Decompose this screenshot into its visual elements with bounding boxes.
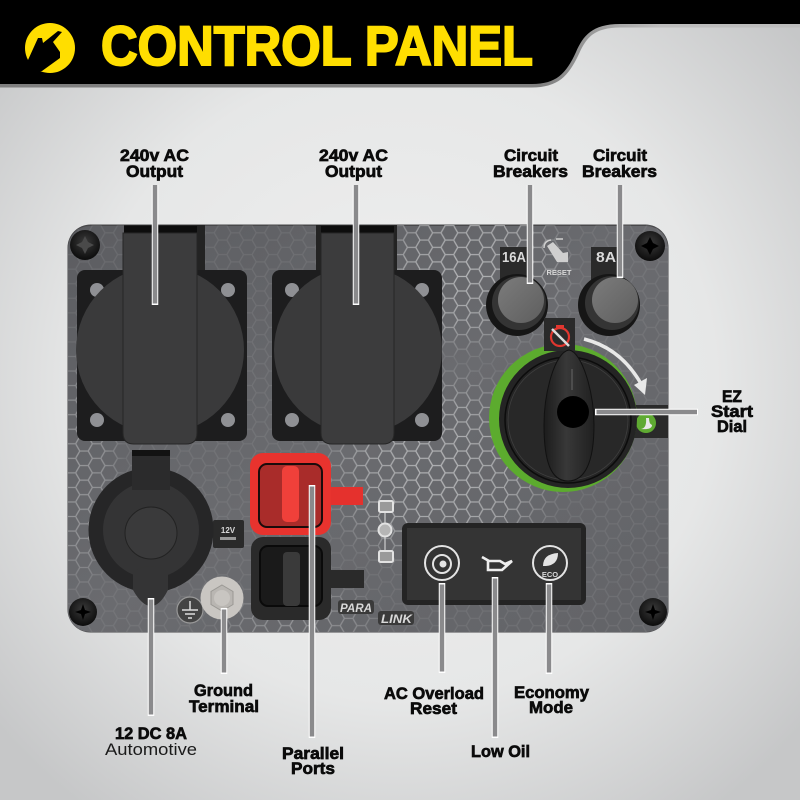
icon: low oil can	[482, 557, 512, 570]
ParaLink logo: LINK	[381, 614, 413, 626]
ParaLink logo	[338, 600, 414, 626]
leader: low oil	[492, 577, 498, 738]
label: EZ Start Dial: Start	[711, 402, 753, 421]
icon: economy leaf	[533, 546, 567, 580]
leader core: AC overload	[440, 584, 444, 672]
label: 12 DC 8A Automotive: 12 DC 8A	[115, 724, 187, 743]
label: Circuit Breakers 16A: Breakers	[493, 162, 568, 181]
label: AC Overload Reset: AC Overload	[384, 684, 484, 703]
label: 240v AC Output left: Output	[126, 162, 183, 181]
parallel port: red	[250, 453, 363, 535]
label: Low Oil: Low Oil	[471, 742, 530, 761]
parallel port: black	[251, 537, 364, 620]
label: Parallel Ports: Ports	[291, 759, 335, 778]
leader core: EZ start	[596, 410, 697, 414]
label: 12 DC 8A Automotive: Automotive	[105, 740, 197, 759]
leader: parallel	[309, 485, 315, 738]
dial handle	[544, 350, 594, 481]
ParaLink logo: PARA	[340, 603, 372, 615]
breaker label tag: 8A: 8A	[596, 249, 616, 266]
label: Circuit Breakers 8A: Breakers	[582, 162, 657, 181]
label: 240v AC Output left: 240v AC	[120, 146, 189, 165]
circuit breaker knob: 16A	[486, 274, 548, 336]
leader core: 240v AC right	[354, 185, 358, 304]
label: 240v AC Output left	[120, 146, 189, 181]
icon: reset hand: RESET	[546, 268, 572, 277]
leader: economy	[546, 583, 552, 674]
panel: control plate	[68, 224, 668, 632]
header band	[0, 0, 800, 84]
leader core: 12 DC	[149, 600, 153, 714]
ground terminal bolt	[200, 576, 244, 620]
label: Ground Terminal	[189, 681, 259, 716]
leader: 240v AC right	[353, 185, 359, 305]
leader core: 8A breaker	[618, 185, 622, 276]
icon: economy leaf: ECO	[542, 570, 558, 579]
label: EZ Start Dial: EZ	[722, 387, 742, 406]
EZ start dial	[489, 318, 668, 492]
icon: AC overload reset	[425, 546, 459, 580]
socket: 12V automotive outlet: 12V	[221, 526, 236, 535]
label: Parallel Ports	[282, 744, 344, 778]
label: 12 DC 8A Automotive	[105, 724, 197, 759]
screw: bottom left	[69, 598, 97, 626]
socket: 12V automotive outlet	[88, 450, 244, 606]
icon: brand hand logo	[20, 23, 75, 75]
leader core: 16A breaker	[528, 185, 532, 282]
icon: reset hand	[544, 239, 572, 277]
label: Circuit Breakers 16A: Circuit	[504, 146, 558, 165]
leader: 16A breaker	[527, 185, 533, 284]
label: 240v AC Output right: 240v AC	[319, 146, 388, 165]
breaker label tag: 16A: 16A	[502, 249, 526, 266]
leader core: low oil	[493, 578, 497, 736]
label: AC Overload Reset	[384, 684, 484, 718]
icon: ground symbol	[177, 597, 203, 623]
leader core: ground	[222, 610, 226, 672]
leader: EZ start	[595, 409, 698, 415]
leader: 8A breaker	[617, 185, 623, 278]
circuit breaker knob: 8A	[578, 274, 640, 336]
breaker label tag: 16A	[500, 247, 527, 283]
icon: parallel link diagram	[378, 501, 393, 562]
screw: top right	[635, 231, 665, 261]
label: Ground Terminal: Ground	[194, 681, 253, 700]
leader: AC overload	[439, 583, 445, 673]
leader core: 240v AC left	[153, 185, 157, 304]
label: Parallel Ports: Parallel	[282, 744, 344, 763]
leader core: parallel	[310, 486, 314, 736]
label: Economy Mode: Mode	[529, 698, 573, 717]
label: Economy Mode	[514, 683, 590, 717]
label: Circuit Breakers 16A	[493, 146, 568, 181]
label: 240v AC Output right: Output	[325, 162, 382, 181]
screw: bottom right	[639, 598, 667, 626]
socket: left 240v AC outlet	[76, 225, 247, 444]
fuel-off tag	[544, 318, 575, 351]
label: Circuit Breakers 8A	[582, 146, 657, 181]
label: EZ Start Dial: Dial	[717, 417, 747, 436]
label: AC Overload Reset: Reset	[410, 699, 457, 718]
leader: 12 DC	[148, 598, 154, 716]
arrow: dial rotation	[584, 339, 647, 395]
breaker label tag: 8A	[591, 247, 618, 283]
label: Economy Mode: Economy	[514, 683, 590, 702]
leader: 240v AC left	[152, 185, 158, 305]
leader core: economy	[547, 584, 551, 672]
label: EZ Start Dial	[711, 387, 753, 436]
indicator panel	[402, 523, 586, 605]
label: 240v AC Output right	[319, 146, 388, 181]
screw: top left	[70, 230, 100, 260]
title: CONTROL PANEL	[101, 14, 533, 77]
socket: right 240v AC outlet	[272, 225, 442, 444]
label: Circuit Breakers 8A: Circuit	[593, 146, 647, 165]
label: Ground Terminal: Terminal	[189, 697, 259, 716]
leader: ground	[221, 608, 227, 674]
